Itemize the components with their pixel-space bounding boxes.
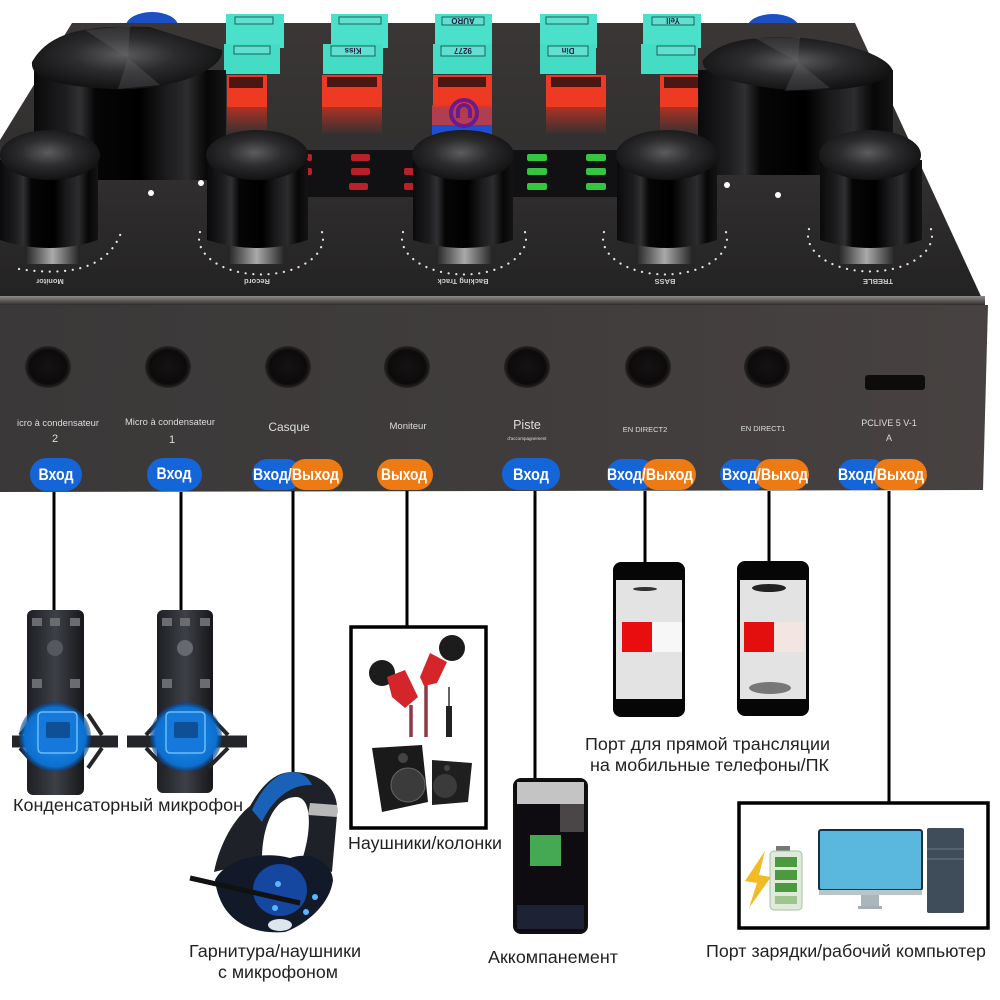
port labels: PCLIVE 5 V-1 — [861, 418, 917, 428]
knob: Backing Track — [402, 130, 526, 286]
knob: Monitor — [0, 130, 122, 286]
knob: Backing Track: Backing Track — [437, 277, 488, 286]
icon: headset — [190, 772, 337, 932]
label: headset: Гарнитура/наушники — [189, 941, 361, 961]
button 1 — [224, 14, 284, 135]
power icon — [451, 100, 477, 126]
icon: phone 1 — [613, 562, 685, 717]
button 3: AURO — [451, 16, 475, 25]
icon: condenser microphone 2 — [127, 610, 247, 793]
pill: mic 2 — [30, 458, 82, 491]
button 3 — [432, 14, 492, 135]
icon: monitor — [819, 830, 922, 909]
button 5: Yell — [666, 16, 680, 25]
top plate — [0, 23, 985, 305]
signal pills — [30, 458, 927, 491]
port labels: A — [886, 433, 892, 443]
knob: Monitor: Monitor — [36, 277, 64, 286]
pill: live 1: Вход/Выход — [722, 465, 808, 484]
pill: track — [502, 458, 560, 490]
label: live streaming port: на мобильные телефоны/ПК — [590, 755, 830, 775]
pill: pc: Вход/Выход — [838, 465, 924, 484]
connector lines — [54, 491, 889, 803]
shock mount — [12, 714, 118, 768]
green LEDs — [527, 154, 606, 190]
port labels — [17, 417, 917, 446]
pill: mic 1: Вход — [156, 464, 192, 483]
shock mount — [127, 714, 247, 768]
port labels: Piste — [513, 418, 541, 432]
port labels: 1 — [169, 434, 175, 446]
port labels: EN DIRECT2 — [623, 425, 667, 434]
icon: battery — [770, 846, 802, 910]
knob: Record: Record — [244, 277, 270, 286]
red LEDs — [300, 154, 414, 190]
green square — [530, 835, 561, 866]
pill: monitor: Выход — [381, 465, 427, 484]
pill: live 2: Вход/Выход — [607, 465, 693, 484]
knob: BASS: BASS — [655, 277, 675, 286]
pill: headset — [252, 459, 343, 490]
knob: BASS — [603, 130, 727, 286]
label: live streaming port — [585, 734, 830, 775]
port labels: icro à condensateur — [17, 418, 99, 428]
pill: headset: Вход/Выход — [253, 465, 339, 484]
label: headset — [189, 941, 361, 982]
icon: computer tower — [927, 828, 964, 913]
level meters — [300, 150, 621, 197]
pill: track: Вход — [513, 465, 549, 484]
button columns — [224, 14, 701, 135]
audio jacks — [25, 346, 790, 388]
pill: live 2 — [607, 459, 696, 490]
button 4 — [540, 14, 606, 135]
pill: mic 1 — [147, 458, 202, 491]
port labels: Micro à condensateur — [125, 417, 215, 427]
button 4: Din — [561, 46, 574, 55]
front panel — [0, 305, 988, 492]
port labels: Moniteur — [390, 421, 426, 432]
icon: lightning bolt — [745, 851, 771, 908]
panel top edge — [0, 296, 985, 305]
button 3: 9277 — [454, 46, 472, 55]
large left knob — [32, 26, 226, 180]
pill: mic 2: Вход — [38, 465, 74, 484]
label: charging and computer: Порт зарядки/рабочий компьютер — [706, 941, 986, 961]
USB port — [865, 375, 925, 390]
blue indicator lights — [126, 12, 799, 42]
label: earphones and speakers: Наушники/колонки — [348, 833, 502, 853]
port labels: d'accompagnement — [507, 436, 547, 441]
port labels: EN DIRECT1 — [741, 424, 785, 433]
red square — [744, 622, 774, 652]
port labels: Casque — [268, 420, 310, 434]
label: live streaming port: Порт для прямой трансляции — [585, 734, 830, 754]
red square — [622, 622, 652, 652]
large right knob — [698, 37, 893, 175]
knob: Record — [199, 130, 323, 286]
panel: earphones and speakers — [351, 627, 486, 828]
icon: earphones — [369, 635, 465, 737]
knob: TREBLE: TREBLE — [863, 277, 893, 286]
pill: monitor — [377, 459, 433, 490]
label: microphone: Конденсаторный микрофон — [13, 795, 243, 815]
label: accompaniment: Аккомпанемент — [488, 947, 618, 967]
mixer device — [0, 12, 988, 492]
icon: condenser microphone 1 — [12, 610, 118, 795]
panel: charging and computer — [739, 803, 988, 928]
port labels: 2 — [52, 433, 58, 445]
button 2: Kiss — [344, 46, 361, 55]
status dots — [148, 180, 781, 198]
pill: live 1 — [720, 459, 809, 490]
icon: accompaniment phone — [514, 779, 587, 933]
icon: speakers — [372, 745, 472, 812]
icon: phone 2 — [737, 561, 809, 716]
knob: TREBLE — [808, 130, 932, 286]
button 2 — [322, 14, 388, 135]
pill: pc — [838, 459, 927, 490]
button 5 — [641, 14, 701, 135]
label: headset: с микрофоном — [218, 962, 338, 982]
